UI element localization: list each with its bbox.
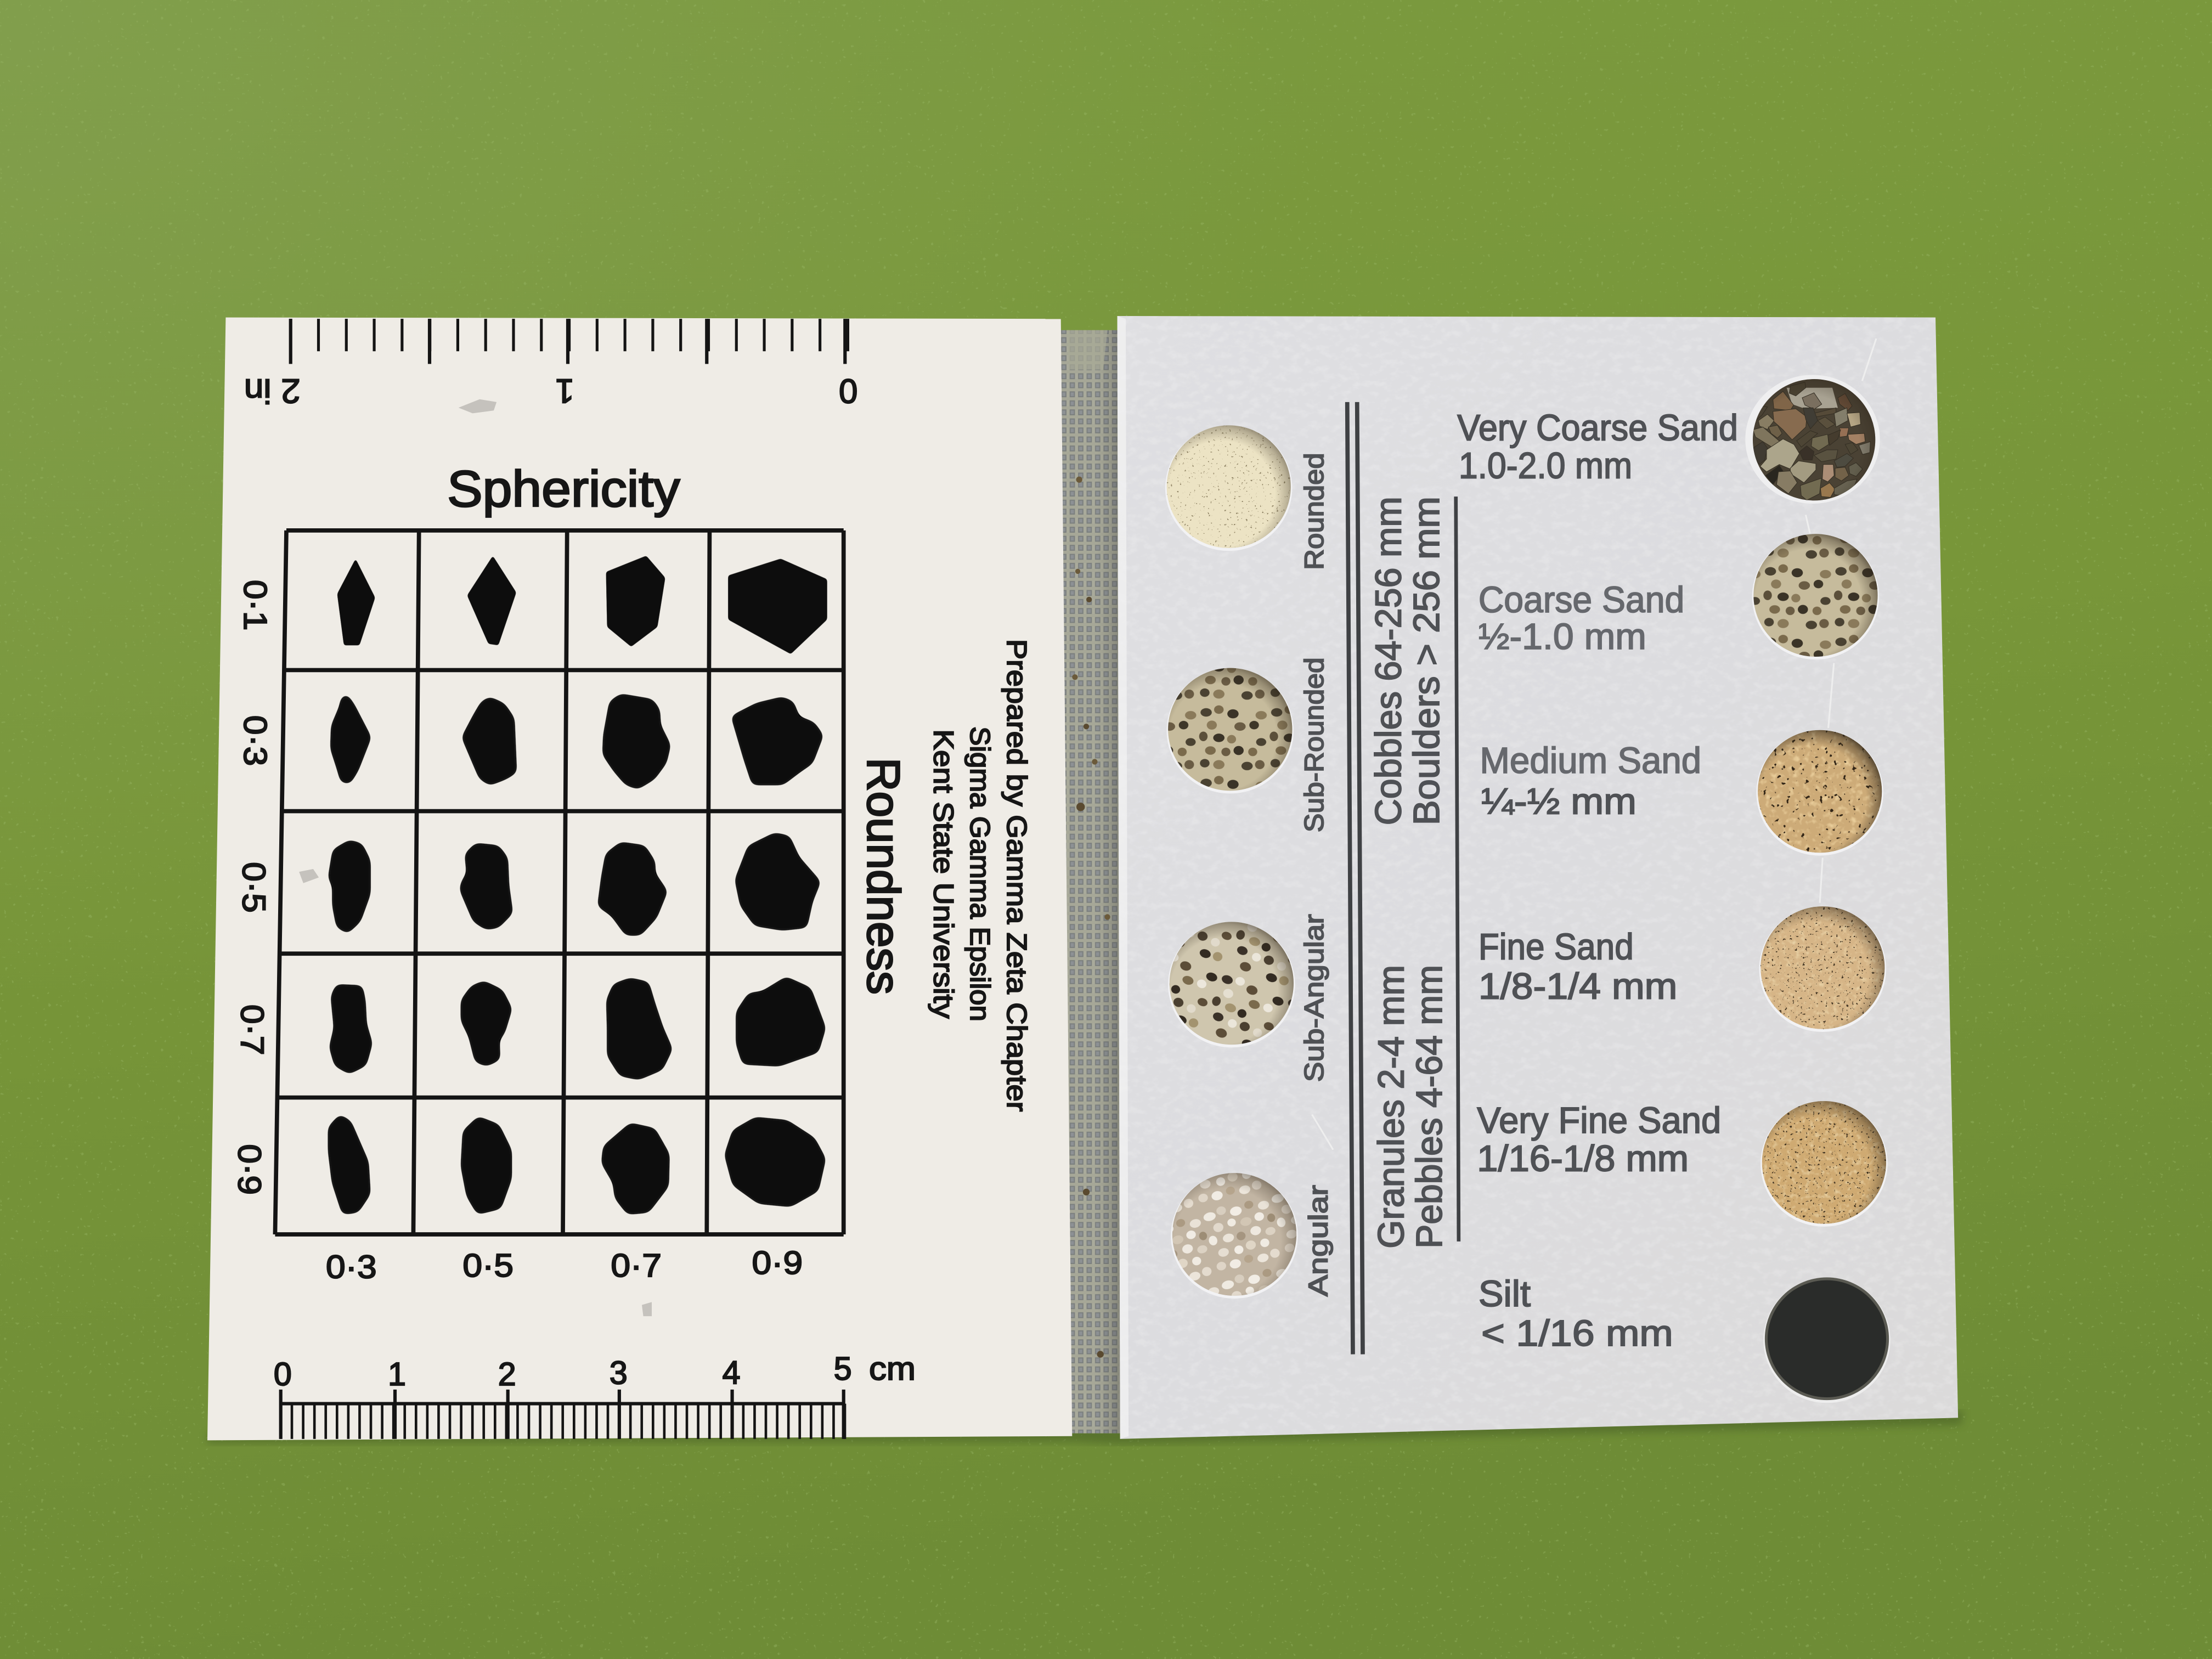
centimetre ruler: 4: [723, 1355, 740, 1391]
label: coarse sand: [1479, 579, 1684, 657]
grain silhouettes: angular row: [337, 556, 827, 654]
heading: Roundness: Roundness: [857, 758, 910, 995]
label: very coarse sand: [1457, 407, 1738, 487]
size list: coarse clasts: Granules 2-4 mm: [1371, 965, 1412, 1249]
grain: roundness 0.1 sphericity 0.5: [467, 556, 516, 645]
size list: coarse clasts: Cobbles 64-256 mm: [1368, 496, 1409, 825]
grain: roundness 0.7 sphericity 0.3: [329, 984, 373, 1074]
panel: cloth hinge: [1058, 330, 1123, 1434]
size list: coarse clasts: [1368, 496, 1450, 1249]
grain: roundness 0.3 sphericity 0.5: [462, 697, 517, 786]
grain: roundness 0.3 sphericity 0.7: [602, 694, 670, 789]
centimetre ruler: [274, 1350, 916, 1439]
grain: roundness 0.1 sphericity 0.3: [337, 558, 375, 645]
grain: roundness 0.1 sphericity 0.9: [728, 558, 827, 654]
sphericity axis labels: 0·3: [326, 1249, 377, 1285]
label: fine sand: [1479, 927, 1677, 1007]
label: Rounded: Rounded: [1300, 453, 1329, 570]
grain silhouettes: rounder rows: [328, 694, 826, 1215]
inch ruler: [244, 319, 857, 410]
sample: angular: [1171, 1173, 1298, 1299]
printing smudges: [299, 399, 652, 1316]
label: medium sand: Medium Sand: [1480, 740, 1701, 781]
card cracks: [1312, 338, 1876, 1150]
credit text: Sigma Gamma Epsilon: [964, 726, 996, 1022]
sample: sub-rounded: [1167, 668, 1294, 793]
roundness axis labels: 0·1: [237, 580, 274, 630]
label: medium sand: [1480, 740, 1701, 822]
label: silt: Silt: [1479, 1273, 1531, 1314]
label: Angular: Angular: [1304, 1185, 1334, 1296]
sphericity axis labels: [326, 1244, 803, 1285]
centimetre ruler: 3: [610, 1355, 628, 1391]
sample: medium sand: [1756, 730, 1883, 856]
label: fine sand: 1/8-1/4 mm: [1479, 966, 1677, 1007]
grain: roundness 0.9 sphericity 0.7: [601, 1123, 669, 1215]
label: fine sand: Fine Sand: [1479, 927, 1634, 968]
label: very coarse sand: Very Coarse Sand: [1457, 407, 1738, 448]
rule lines: [1347, 402, 1459, 1355]
credit text: Prepared by Gamma Zeta Chapter: [1001, 639, 1033, 1111]
grid lines: [275, 531, 844, 1234]
sample: sub-angular: [1168, 922, 1295, 1047]
grain: roundness 0.7 sphericity 0.9: [736, 977, 826, 1066]
sample: very fine sand: [1760, 1101, 1888, 1227]
sphericity axis labels: 0·5: [462, 1247, 514, 1284]
grain: roundness 0.3 sphericity 0.9: [731, 697, 823, 785]
label: very fine sand: 1/16-1/8 mm: [1477, 1138, 1689, 1179]
grain: roundness 0.1 sphericity 0.7: [606, 556, 665, 647]
label: Sub-Angular: Sub-Angular: [1300, 914, 1329, 1082]
label: very coarse sand: 1.0-2.0 mm: [1459, 445, 1632, 487]
grain: roundness 0.5 sphericity 0.3: [328, 840, 370, 934]
card surface: [207, 318, 1072, 1440]
card shadows: [207, 1410, 1963, 1444]
roundness axis labels: 0·9: [232, 1144, 268, 1195]
roundness axis labels: 0·5: [235, 862, 272, 913]
label: silt: < 1/16 mm: [1481, 1313, 1673, 1354]
inch ruler: 1: [555, 372, 574, 410]
panel: sphericity and roundness card: [207, 318, 1072, 1440]
sphericity axis labels: 0·7: [611, 1247, 662, 1284]
grain: roundness 0.9 sphericity 0.5: [461, 1116, 512, 1215]
card surface: [1118, 316, 1958, 1439]
roundness axis labels: 0·3: [237, 715, 274, 766]
grain: roundness 0.9 sphericity 0.3: [328, 1114, 370, 1215]
label: very fine sand: Very Fine Sand: [1477, 1100, 1721, 1141]
centimetre ruler: 0: [274, 1356, 292, 1392]
inch ruler: 0: [839, 372, 857, 410]
label: coarse sand: Coarse Sand: [1479, 579, 1684, 620]
credit text: Kent State University: [928, 729, 960, 1019]
grain: roundness 0.5 sphericity 0.7: [597, 842, 668, 935]
grain: roundness 0.5 sphericity 0.9: [735, 833, 821, 930]
size list: coarse clasts: Pebbles 4-64 mm: [1409, 965, 1450, 1249]
heading: Sphericity: Sphericity: [447, 460, 680, 517]
sample: rounded: [1165, 425, 1292, 551]
chart: sphericity and roundness grid: [232, 531, 844, 1285]
size list: coarse clasts: Boulders > 256 mm: [1406, 496, 1447, 825]
panel: sediment sample card: [1118, 316, 1958, 1439]
centimetre ruler: 2: [498, 1356, 516, 1392]
centimetre ruler: 5: [834, 1350, 852, 1387]
sample: very coarse sand: [1745, 375, 1880, 504]
sample: silt: [1763, 1277, 1891, 1403]
grain: roundness 0.3 sphericity 0.3: [330, 694, 371, 784]
roundness axis labels: 0·7: [234, 1005, 271, 1055]
grain: roundness 0.5 sphericity 0.5: [460, 843, 513, 930]
sample: fine sand: [1759, 906, 1886, 1032]
sphericity axis labels: 0·9: [752, 1244, 803, 1281]
label: very fine sand: [1477, 1100, 1721, 1179]
label: Sub-Rounded: Sub-Rounded: [1300, 657, 1329, 832]
credit text: [928, 639, 1033, 1111]
inch ruler: 2 in: [244, 372, 301, 410]
grain: roundness 0.7 sphericity 0.5: [461, 981, 512, 1066]
label: coarse sand: ½-1.0 mm: [1479, 616, 1646, 657]
label: silt: [1479, 1273, 1673, 1354]
centimetre ruler: 1: [388, 1356, 406, 1392]
centimetre ruler: cm: [869, 1350, 916, 1387]
label: medium sand: ¼-½ mm: [1481, 781, 1637, 822]
grain: roundness 0.7 sphericity 0.7: [606, 978, 673, 1080]
sample: coarse sand: [1752, 534, 1879, 659]
roundness axis labels: [232, 580, 274, 1195]
grain: roundness 0.9 sphericity 0.9: [725, 1117, 826, 1207]
